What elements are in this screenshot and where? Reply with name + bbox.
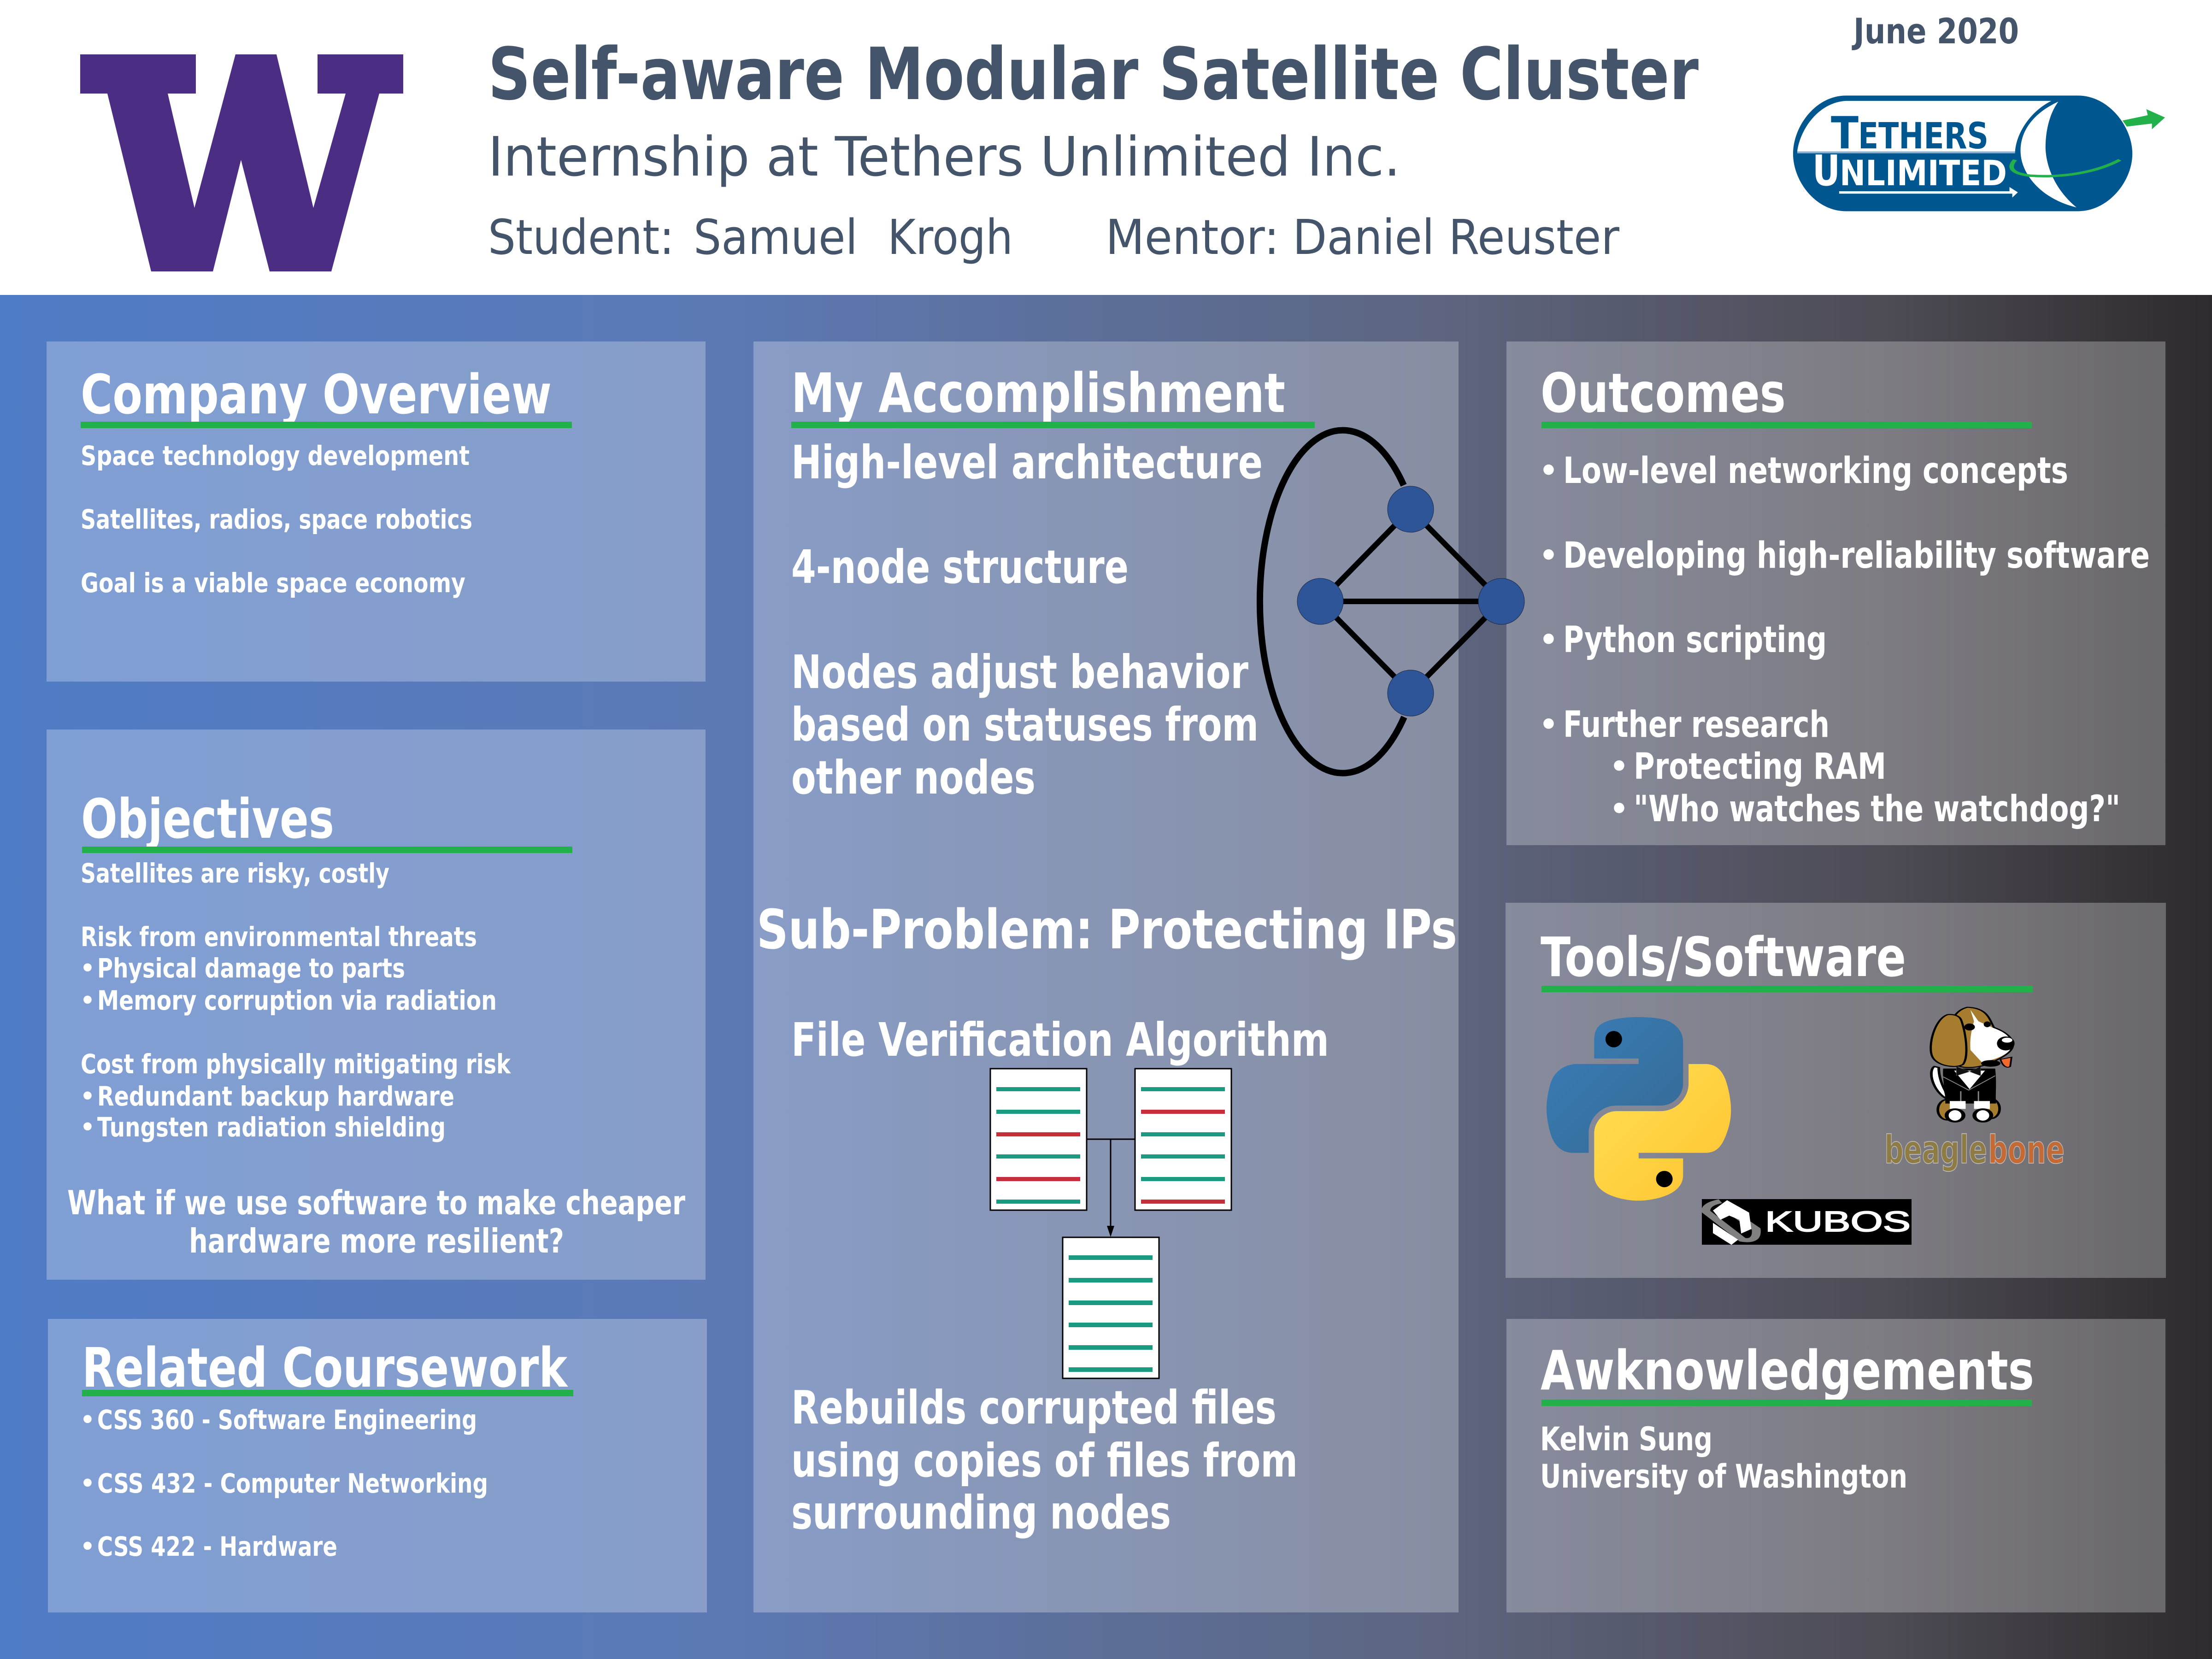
student name: Samuel xyxy=(694,209,858,265)
panel: related coursework xyxy=(48,1319,707,1612)
title: Self-aware Modular Satellite Cluster xyxy=(488,32,1699,116)
text block: outcomes list: • xyxy=(1610,750,1629,784)
icon: KubOS logo xyxy=(1702,1199,1912,1245)
text block: risk and cost xyxy=(80,858,511,1143)
heading: outcomes xyxy=(1541,361,2032,428)
text block: architecture: Nodes adjust behavior xyxy=(791,645,1249,699)
text block: company facts: Satellites, radios, space robotics xyxy=(81,504,472,535)
panel: objectives xyxy=(47,729,706,1280)
student name: Krogh xyxy=(888,209,1013,265)
mentor name xyxy=(1106,209,1619,265)
heading: objectives xyxy=(81,787,572,853)
text block: risk and cost: Physical damage to parts xyxy=(97,953,405,984)
text block: architecture: based on statuses from xyxy=(791,698,1259,752)
panel: acknowledgements xyxy=(1506,1319,2165,1612)
text block: outcomes list xyxy=(1539,450,2150,830)
text block: course list: CSS 432 - Computer Networking xyxy=(97,1468,488,1499)
text block: acknowledged people xyxy=(1540,1420,1907,1495)
text block: rebuild description xyxy=(791,1381,1298,1540)
text block: outcomes list: • xyxy=(1539,623,1558,657)
text block: outcomes list: • xyxy=(1539,539,1558,573)
icon: Tethers Unlimited logo: NLIMITED xyxy=(1840,153,2007,194)
text block: outcomes list: Low-level networking concepts xyxy=(1563,450,2068,492)
text block: course list: • xyxy=(80,1406,95,1433)
text block: course list xyxy=(80,1404,488,1562)
panel background xyxy=(1506,341,2165,845)
heading: tools/software: Tools/Software xyxy=(1541,925,1906,989)
icon: python logo xyxy=(1547,1017,1731,1200)
icon: Tethers Unlimited logo: U xyxy=(1812,146,1840,195)
text block: company facts xyxy=(81,440,472,599)
student name xyxy=(488,209,1013,265)
heading: sub-problem: Sub-Problem: Protecting IPs xyxy=(757,898,1457,961)
mentor name: Daniel Reuster xyxy=(1293,209,1619,265)
panel background xyxy=(48,1319,707,1612)
text block: company facts: Space technology development xyxy=(81,440,470,471)
text block: architecture: other nodes xyxy=(791,751,1035,805)
text block: rebuild description: using copies of files from xyxy=(791,1434,1298,1488)
icon: beagle mascot xyxy=(1931,1007,2015,1122)
text block: rebuild description: surrounding nodes xyxy=(791,1486,1171,1540)
panel background xyxy=(47,729,706,1280)
text block: risk and cost: Tungsten radiation shielding xyxy=(97,1112,446,1143)
subheading: file verification: File Verification Algorithm xyxy=(791,1013,1329,1067)
logo text: beaglebone: beagle xyxy=(1884,1127,1987,1172)
text block: risk and cost: • xyxy=(80,955,95,982)
heading: awknowledgements: Awknowledgements xyxy=(1541,1339,2034,1402)
text block: acknowledged people: Kelvin Sung xyxy=(1540,1420,1712,1458)
heading: my accomplishment: My Accomplishment xyxy=(791,361,1285,425)
text block: risk and cost: • xyxy=(80,1083,95,1110)
icon: Tethers Unlimited logo: T xyxy=(1831,107,1859,159)
heading: company overview: Company Overview xyxy=(81,363,552,426)
panel: tools and software xyxy=(1506,903,2166,1278)
heading: related coursework: Related Coursework xyxy=(82,1336,568,1400)
callout: software question: hardware more resilient? xyxy=(189,1222,564,1260)
text block: architecture: 4-node structure xyxy=(791,540,1129,594)
subtitle: Internship at Tethers Unlimited Inc. xyxy=(488,125,1400,188)
text block: outcomes list: • xyxy=(1539,708,1558,742)
text block: course list: • xyxy=(80,1533,95,1560)
student name: Student: xyxy=(488,209,674,265)
icon: UW W logo xyxy=(80,54,403,271)
text block: architecture xyxy=(791,435,1263,805)
icon: Tethers Unlimited logo: ETHERS xyxy=(1858,116,1988,157)
text block: course list: • xyxy=(80,1470,95,1497)
text block: rebuild description: Rebuilds corrupted files xyxy=(791,1381,1277,1435)
chart: file verification diagram xyxy=(990,1069,1231,1378)
text block: outcomes list: Python scripting xyxy=(1563,619,1827,661)
panel background xyxy=(1506,1319,2165,1612)
chart: 4-node network diagram xyxy=(1260,430,1524,773)
icon: KubOS logo: KUBOS xyxy=(1765,1206,1911,1238)
text block: acknowledged people: University of Washington xyxy=(1540,1458,1907,1495)
header xyxy=(80,11,2165,271)
text block: company facts: Goal is a viable space economy xyxy=(81,567,465,599)
text block: outcomes list: Further research xyxy=(1563,704,1830,746)
panel background xyxy=(47,341,706,682)
callout: software question xyxy=(67,1183,685,1260)
text block: risk and cost: • xyxy=(80,987,95,1014)
text block: outcomes list: • xyxy=(1610,792,1629,826)
text block: outcomes list: Protecting RAM xyxy=(1634,746,1886,788)
icon: Tethers Unlimited logo xyxy=(1793,95,2165,211)
text block: risk and cost: Cost from physically mitigating risk xyxy=(81,1048,511,1080)
text block: risk and cost: • xyxy=(80,1114,95,1141)
text block: risk and cost: Satellites are risky, costly xyxy=(81,858,389,889)
date: June 2020 xyxy=(1852,11,2019,52)
text block: risk and cost: Redundant backup hardware xyxy=(97,1081,454,1112)
mentor name: Mentor: xyxy=(1106,209,1279,265)
callout: software question: What if we use software to make cheaper xyxy=(67,1183,685,1222)
text block: course list: CSS 422 - Hardware xyxy=(97,1531,337,1562)
panel: company overview xyxy=(47,341,706,682)
logo text: beaglebone: bone xyxy=(1988,1127,2065,1172)
heading: objectives: Objectives xyxy=(81,787,334,851)
text block: outcomes list: • xyxy=(1539,454,1558,488)
text block: course list: CSS 360 - Software Engineering xyxy=(97,1404,477,1435)
panel: outcomes xyxy=(1506,341,2165,845)
text block: risk and cost: Risk from environmental threats xyxy=(81,921,477,953)
panel background xyxy=(753,341,1459,1612)
panel background xyxy=(1506,903,2166,1278)
text block: risk and cost: Memory corruption via radiation xyxy=(97,985,497,1016)
heading: outcomes: Outcomes xyxy=(1541,361,1786,425)
text block: architecture: High-level architecture xyxy=(791,435,1263,489)
panel: my accomplishment xyxy=(753,341,1524,1612)
